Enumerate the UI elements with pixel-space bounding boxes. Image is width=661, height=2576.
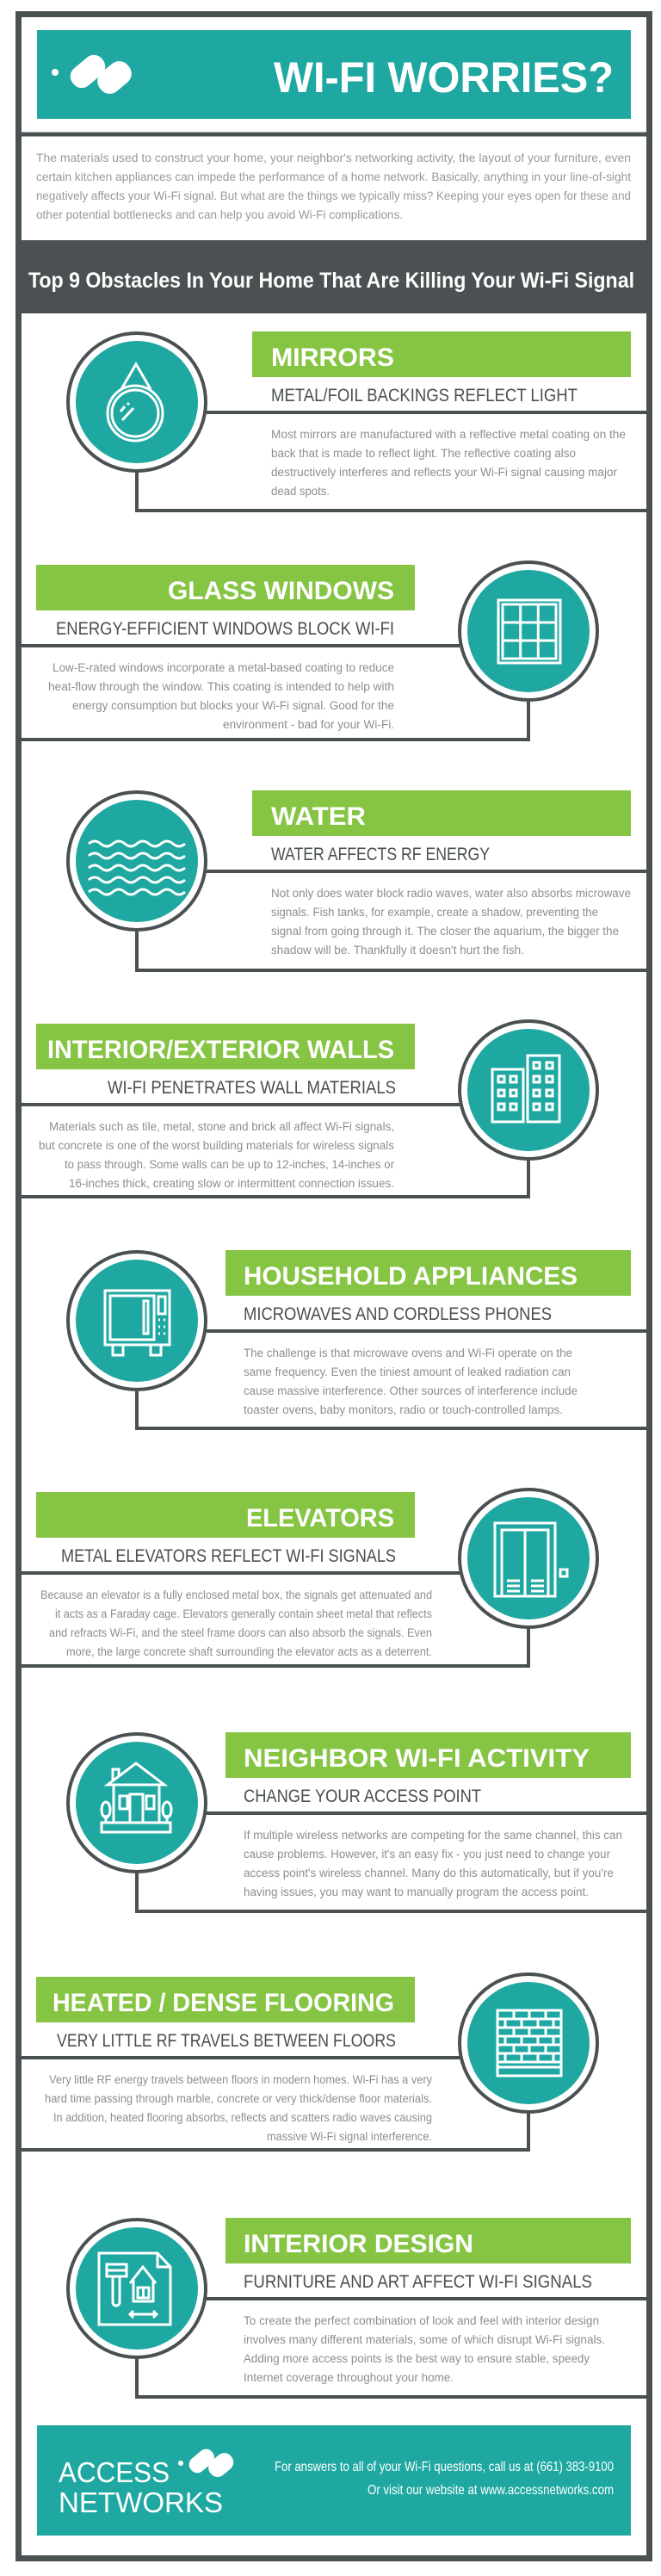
panel: glass windows	[22, 562, 597, 740]
intro text	[36, 151, 631, 221]
panel: neighbor wi-fi activity: having issues, you may want to manually program the access point.	[244, 1886, 589, 1898]
icon: interior design	[68, 2220, 206, 2357]
icon: mirror	[68, 333, 206, 471]
panel: elevators: it acts as a Faraday cage. Elevators generally contain sheet metal that reflects	[55, 1607, 432, 1620]
panel: walls: WI-FI PENETRATES WALL MATERIALS	[108, 1078, 396, 1098]
panel: mirrors	[68, 331, 646, 511]
panel: elevators: ELEVATORS	[246, 1504, 394, 1533]
panel: household appliances: The challenge is that microwave ovens and Wi-Fi operate on the	[244, 1347, 572, 1359]
panel: water	[68, 790, 646, 970]
panel: interior design: To create the perfect combination of look and feel with interior design	[244, 2314, 599, 2327]
intro text: certain kitchen appliances can impede the performance of a home network. Basically, anything in your line-of-sight	[36, 170, 631, 183]
panel: heated flooring: HEATED / DENSE FLOORING	[53, 1989, 394, 2017]
panel: heated flooring: hard time passing through marble, concrete or very thick/dense floor materials.	[45, 2092, 432, 2105]
panel: water: shadow will be. Thankfully it doesn't hurt the fish.	[271, 944, 524, 957]
panel: interior design: Internet coverage throughout your home.	[244, 2371, 454, 2384]
panel: neighbor wi-fi activity: If multiple wireless networks are competing for the same channel, this can	[244, 1829, 622, 1842]
panel: elevators: more, the large concrete shaft surrounding the elevator acts as a deterrent.	[66, 1645, 432, 1658]
icon: elevator	[460, 1489, 597, 1627]
panel: glass windows: heat-flow through the window. This coating is intended to help with	[48, 680, 394, 693]
panel: mirrors: dead spots.	[271, 485, 330, 498]
icon: microwave	[68, 1252, 206, 1390]
panel: household appliances: cause massive interference. Other sources of interference include	[244, 1384, 578, 1397]
panel: heated flooring: Very little RF energy travels between floors in modern homes. Wi-Fi has a very	[49, 2073, 432, 2086]
panel: interior design: INTERIOR DESIGN	[244, 2230, 473, 2258]
panel: interior design: Adding more access points is the best way to ensure stable, speedy	[244, 2352, 590, 2365]
panel: heated flooring: In addition, heated flooring absorbs, reflects and scatters radio waves causing	[53, 2111, 432, 2124]
icon: bricks	[460, 1974, 597, 2112]
panel: mirrors: destructively interferes and reflects your Wi-Fi signal causing major	[271, 466, 617, 479]
icon: buildings	[460, 1021, 597, 1159]
panel: heated flooring: VERY LITTLE RF TRAVELS BETWEEN FLOORS	[57, 2031, 396, 2051]
footer contact text: Or visit our website at www.accessnetworks.com	[368, 2483, 614, 2498]
title: WI-FI WORRIES?	[274, 53, 614, 102]
panel: elevators: Because an elevator is a fully enclosed metal box, the signals get attenuated and	[40, 1588, 432, 1601]
panel: walls: to pass through. Some walls can be up to 12-inches, 14-inches or	[65, 1158, 394, 1171]
panel: water: Not only does water block radio waves, water also absorbs microwave	[271, 887, 631, 900]
icon: logo	[52, 51, 136, 98]
panel: mirrors: MIRRORS	[271, 344, 394, 372]
panel: heated flooring	[22, 1974, 597, 2150]
intro text: The materials used to construct your home, your neighbor's networking activity, the layout of your furniture, even	[36, 151, 631, 164]
panel: neighbor wi-fi activity: access point's wireless channel. Many do this automatically, but if you're	[244, 1867, 614, 1879]
header banner	[37, 30, 631, 119]
panel: elevators	[22, 1489, 597, 1666]
intro text: other potential bottlenecks and can help you avoid Wi-Fi complications.	[36, 207, 403, 221]
footer logo	[59, 2446, 237, 2518]
panel: neighbor wi-fi activity: cause problems. However, it's an easy fix - you just need to change your	[244, 1848, 610, 1861]
panel: glass windows: environment - bad for your Wi-Fi.	[223, 718, 394, 731]
panel: household appliances: same frequency. Even the tiniest amount of leaked radiation can	[244, 1365, 571, 1378]
panel: household appliances	[68, 1250, 646, 1428]
panel: glass windows: Low-E-rated windows incorporate a metal-based coating to reduce	[53, 661, 394, 674]
panel: water: signal from going through it. The closer the aquarium, the bigger the	[271, 925, 619, 938]
panel: glass windows: GLASS WINDOWS	[168, 577, 394, 605]
panel: walls: 16-inches thick, creating slow or intermittent connection issues.	[69, 1177, 394, 1190]
section heading band	[22, 240, 646, 313]
footer logo: NETWORKS	[59, 2486, 223, 2518]
panel: heated flooring: massive Wi-Fi signal interference.	[267, 2130, 432, 2143]
panel: water: WATER AFFECTS RF ENERGY	[271, 845, 490, 864]
panel: neighbor wi-fi activity	[68, 1732, 646, 1911]
panel: walls	[22, 1021, 597, 1197]
panel: mirrors: Most mirrors are manufactured with a reflective metal coating on the	[271, 428, 626, 441]
panel: glass windows: ENERGY-EFFICIENT WINDOWS BLOCK WI-FI	[56, 619, 394, 639]
panel: walls: but concrete is one of the worst building materials for wireless signals	[39, 1139, 394, 1152]
panel: interior design	[68, 2218, 646, 2397]
panel: household appliances: HOUSEHOLD APPLIANCES	[244, 1262, 578, 1291]
panel: neighbor wi-fi activity: NEIGHBOR WI-FI ACTIVITY	[244, 1744, 590, 1773]
panel: walls: Materials such as tile, metal, stone and brick all affect Wi-Fi signals,	[49, 1120, 394, 1133]
panel: walls: INTERIOR/EXTERIOR WALLS	[47, 1036, 394, 1064]
panel: elevators: METAL ELEVATORS REFLECT WI-FI SIGNALS	[61, 1546, 396, 1566]
footer logo: ACCESS	[59, 2456, 170, 2488]
footer	[37, 2425, 631, 2536]
panel: water: WATER	[271, 802, 366, 831]
panel: household appliances: MICROWAVES AND CORDLESS PHONES	[244, 1304, 552, 1324]
panel: neighbor wi-fi activity: CHANGE YOUR ACCESS POINT	[244, 1786, 481, 1806]
icon: window	[460, 562, 597, 700]
icon: house	[68, 1734, 206, 1872]
panel: interior design: FURNITURE AND ART AFFECT WI-FI SIGNALS	[244, 2272, 592, 2292]
panel: interior design: involves many different materials, some of which disrupt Wi-Fi signals.	[244, 2333, 605, 2346]
panel: mirrors: back that is made to reflect light. The reflective coating also	[271, 447, 576, 460]
panel: mirrors: METAL/FOIL BACKINGS REFLECT LIGHT	[271, 386, 578, 406]
panel: household appliances: toaster ovens, baby monitors, radio or touch-controlled lamps.	[244, 1403, 563, 1416]
panel: elevators: and refracts Wi-Fi, and the steel frame doors can also absorb the signals. Even	[49, 1626, 432, 1639]
footer contact text	[275, 2460, 614, 2498]
intro text: negatively affects your Wi-Fi signal. But what are the things we typically miss? Keeping your eyes open for these and	[36, 189, 631, 202]
panel: glass windows: energy consumption but blocks your Wi-Fi signal. Good for the	[72, 699, 394, 712]
panel: water: signals. Fish tanks, for example, create a shadow, preventing the	[271, 906, 598, 919]
icon: water waves	[68, 792, 206, 930]
